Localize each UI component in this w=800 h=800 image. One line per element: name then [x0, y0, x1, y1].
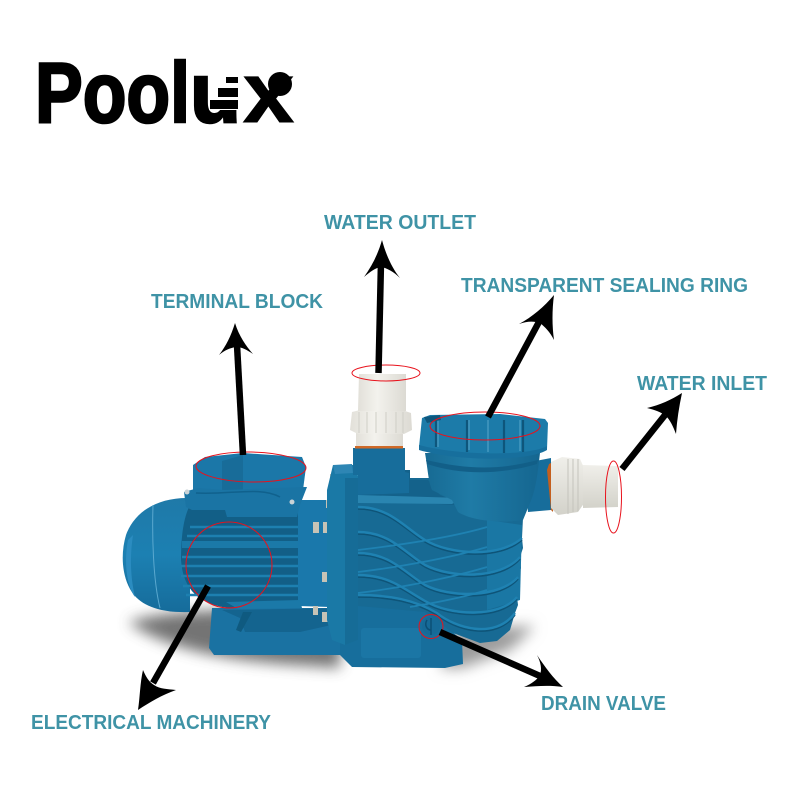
- red marker: drain valve: [419, 614, 443, 638]
- outlet union: [350, 410, 412, 446]
- base: [209, 600, 463, 668]
- outlet collar: [353, 446, 409, 495]
- terminal block: [184, 453, 307, 517]
- label: water inlet: WATER INLET: [637, 373, 767, 395]
- inlet neck: [525, 458, 551, 512]
- arrow: electrical machinery: [138, 586, 208, 710]
- red marker: water inlet: [606, 461, 622, 533]
- volute ribs: [358, 509, 522, 631]
- arrow: water outlet: [364, 240, 400, 373]
- strainer lid: [419, 414, 548, 459]
- logo: Poolux: Pool: [35, 46, 190, 141]
- motor fan cover: [123, 498, 190, 612]
- arrow: terminal block: [219, 323, 253, 455]
- label: terminal block: TERMINAL BLOCK: [151, 291, 324, 313]
- outlet pipe: [358, 374, 406, 411]
- red marker: water outlet: [352, 365, 420, 381]
- label: drain valve: DRAIN VALVE: [541, 693, 666, 715]
- arrow: transparent sealing ring: [488, 295, 554, 417]
- volute housing: [358, 470, 525, 643]
- inlet union: [547, 457, 585, 515]
- red marker: terminal block: [196, 451, 306, 483]
- arrow: drain valve: [440, 632, 563, 687]
- inlet pipe: [583, 465, 618, 508]
- logo: Poolux: u: [190, 46, 241, 141]
- flange plate: [327, 464, 358, 645]
- pump illustration: [123, 374, 618, 668]
- label: electrical machinery: ELECTRICAL MACHINERY: [31, 712, 272, 734]
- bolts: [313, 474, 335, 622]
- ground shadow: [128, 610, 535, 668]
- logo: Poolux: x: [243, 46, 294, 141]
- strainer pot: [425, 453, 540, 522]
- motor body with fins: [181, 500, 330, 609]
- label: water outlet: WATER OUTLET: [324, 212, 476, 234]
- drain valve: [422, 617, 440, 635]
- red marker: sealing ring: [430, 412, 540, 440]
- arrow: water inlet: [622, 393, 682, 469]
- label: transparent sealing ring: TRANSPARENT SEALING RING: [461, 275, 748, 297]
- red marker: electrical machinery: [186, 522, 272, 608]
